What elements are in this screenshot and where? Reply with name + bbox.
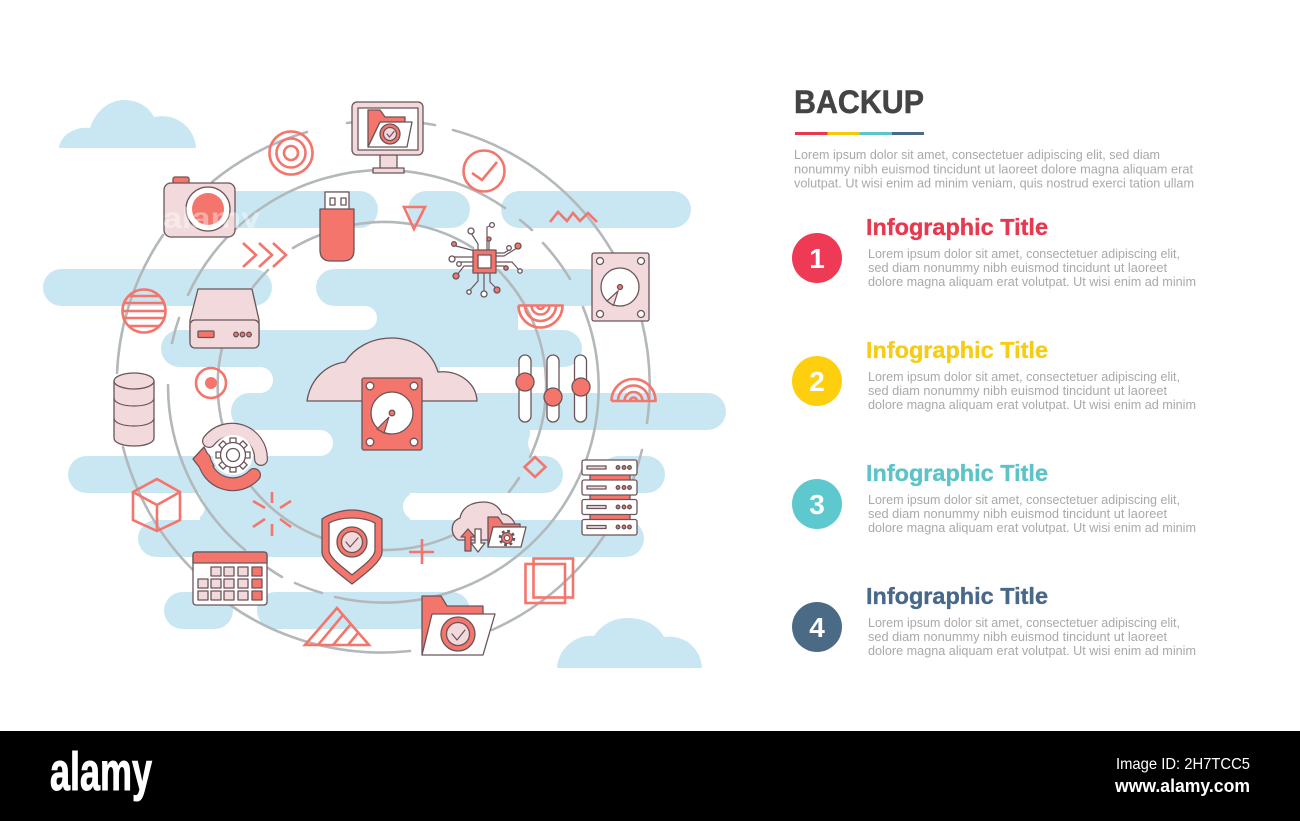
icon: microchip xyxy=(449,223,522,297)
item 1: Lorem ipsum dolor sit amet, consectetuer adipiscing elit, xyxy=(868,247,1180,261)
text block: intro paragraph xyxy=(794,148,1194,190)
item 4: dolore magna aliquam erat volutpat. Ut wisi enim ad minim xyxy=(868,644,1196,658)
icon: chevrons xyxy=(243,243,286,267)
icon: server rack xyxy=(582,460,637,535)
item 3: sed diam nonummy nibh euismod tincidunt ut laoreet xyxy=(868,507,1168,521)
icon: striped circle xyxy=(122,290,166,332)
item 1: dolore magna aliquam erat volutpat. Ut wisi enim ad minim xyxy=(868,275,1196,289)
item 2: Lorem ipsum dolor sit amet, consectetuer adipiscing elit, xyxy=(868,370,1180,384)
panel: blue cloud and pill background xyxy=(43,100,728,668)
item 4: sed diam nonummy nibh euismod tincidunt ut laoreet xyxy=(868,630,1168,644)
icon: overlapping squares xyxy=(526,558,573,603)
icon: diamond xyxy=(524,457,546,477)
icon: zigzag line xyxy=(550,212,597,222)
icon: half rings down xyxy=(518,306,562,328)
icon: triangle outline xyxy=(404,207,425,229)
icon: sliders xyxy=(516,355,590,422)
icon: folder with check xyxy=(422,596,495,655)
icon: database xyxy=(114,373,154,446)
icon: USB drive xyxy=(320,192,354,261)
icon: shield xyxy=(322,510,382,584)
icon: central cloud with hard disk xyxy=(307,338,477,450)
icon: cube outline xyxy=(133,479,180,531)
icon: external drive xyxy=(190,289,259,348)
icon: check circle xyxy=(464,150,504,192)
panel: black watermark footer: www.alamy.com xyxy=(1114,776,1250,796)
icon: calendar xyxy=(193,552,267,605)
item 1: 1 xyxy=(809,243,825,274)
chart: concentric dashed rings xyxy=(117,120,650,653)
item 2: sed diam nonummy nibh euismod tincidunt ut laoreet xyxy=(868,384,1168,398)
text block: intro paragraph: nonummy nibh euismod tincidunt ut laoreet dolore magna aliquam erat xyxy=(794,162,1194,176)
icon: monitor with folder xyxy=(352,102,423,173)
item 1 xyxy=(792,214,1196,289)
panel: black watermark footer: Image ID: 2H7TCC5 xyxy=(1116,756,1250,773)
icon: cloud with folder and gear xyxy=(452,502,526,552)
icon: small target xyxy=(196,368,226,398)
item 3 xyxy=(792,460,1196,535)
watermark: faint alamy over camera: alamy xyxy=(163,202,260,235)
title underline xyxy=(795,132,924,135)
item 2: Infographic Title xyxy=(866,337,1048,363)
icon: camera xyxy=(164,177,235,237)
icon: sync with gear xyxy=(193,430,261,484)
item 2: 2 xyxy=(809,366,825,397)
item 3: 3 xyxy=(809,489,825,520)
panel: black watermark footer: alamy xyxy=(50,742,152,802)
item 1: sed diam nonummy nibh euismod tincidunt ut laoreet xyxy=(868,261,1168,275)
icon: half rings up xyxy=(612,379,656,401)
item 3: Lorem ipsum dolor sit amet, consectetuer adipiscing elit, xyxy=(868,493,1180,507)
icon: spark lines xyxy=(253,492,291,536)
icon: hatched triangle xyxy=(305,608,369,645)
item 4 xyxy=(792,583,1196,658)
item 3: Infographic Title xyxy=(866,460,1048,486)
item 2 xyxy=(792,337,1196,412)
icon: target rings xyxy=(270,132,312,174)
item 4: Infographic Title xyxy=(866,583,1048,609)
icon: hard disk xyxy=(592,253,649,321)
item 4: 4 xyxy=(809,612,825,643)
item 4: Lorem ipsum dolor sit amet, consectetuer adipiscing elit, xyxy=(868,616,1180,630)
panel: black watermark footer xyxy=(0,731,1300,821)
text block: intro paragraph: volutpat. Ut wisi enim ad minim veniam, quis nostrud exerci tation ullam xyxy=(794,176,1194,190)
heading: BACKUP: BACKUP xyxy=(794,84,924,120)
item 3: dolore magna aliquam erat volutpat. Ut wisi enim ad minim xyxy=(868,521,1196,535)
item 2: dolore magna aliquam erat volutpat. Ut wisi enim ad minim xyxy=(868,398,1196,412)
text block: intro paragraph: Lorem ipsum dolor sit amet, consectetuer adipiscing elit, sed diam xyxy=(794,148,1160,162)
icon: plus xyxy=(409,539,434,564)
item 1: Infographic Title xyxy=(866,214,1048,240)
